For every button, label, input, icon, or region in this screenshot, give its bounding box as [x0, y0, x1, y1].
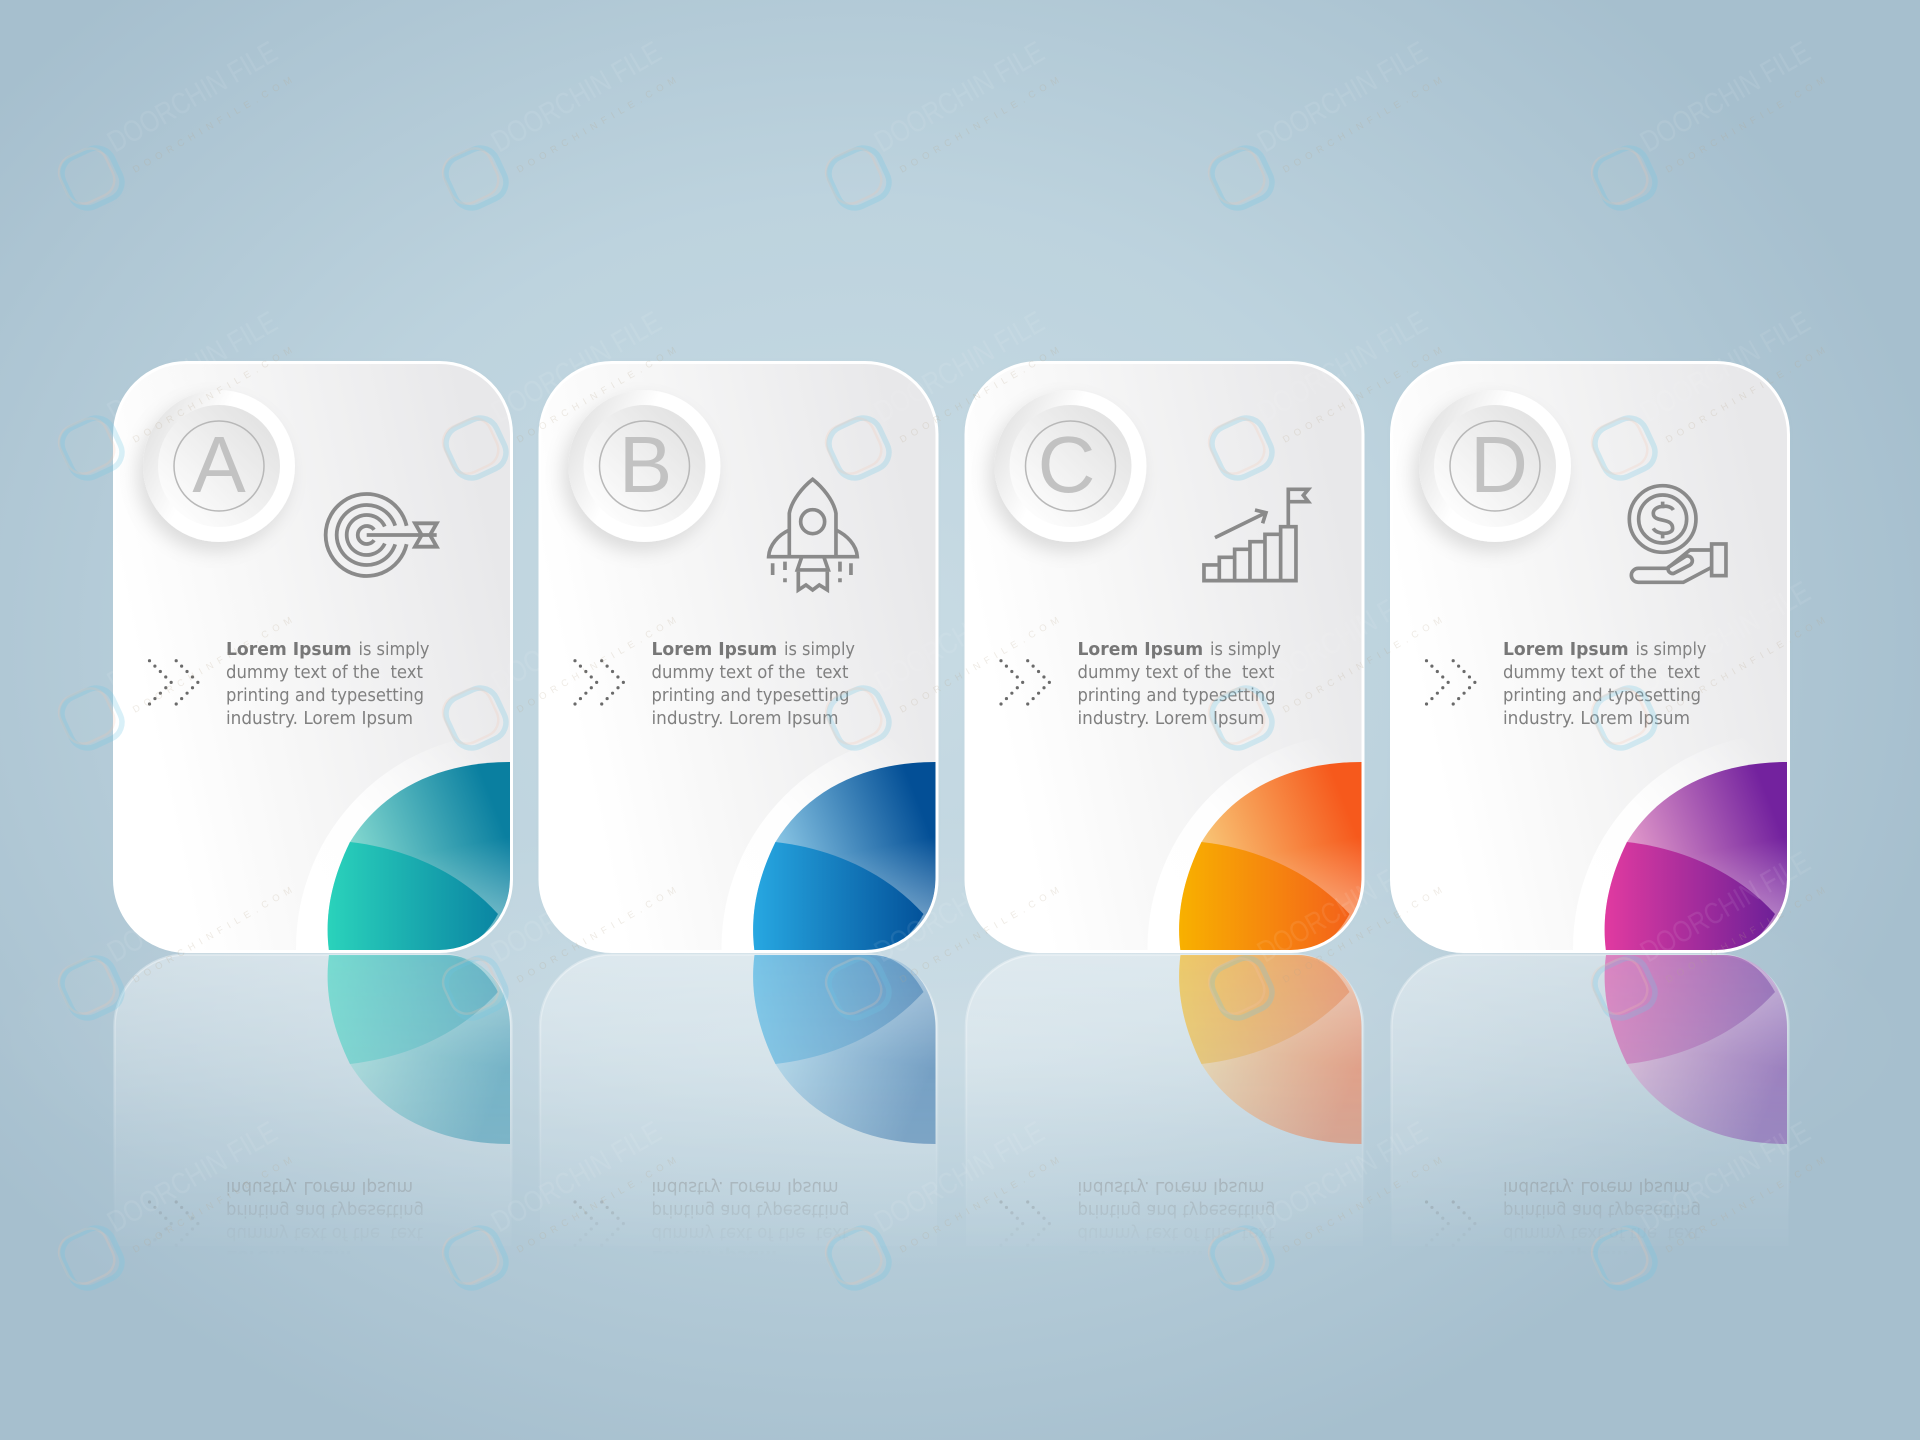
watermark grid: DOORCHIN FILE	[869, 305, 1050, 429]
card body	[1392, 362, 1788, 952]
watermark grid: DOORCHINFILE.COM	[515, 885, 678, 986]
watermark grid: DOORCHIN FILE	[486, 575, 667, 699]
watermark grid: DOORCHINFILE.COM	[131, 885, 294, 986]
text block: Lorem Ipsum	[1503, 640, 1629, 660]
watermark grid: DOORCHINFILE.COM	[131, 1155, 294, 1256]
reflection of card B: Lorem Ipsum	[652, 1246, 777, 1266]
reflection of card D: Lorem Ipsum	[1503, 1246, 1629, 1266]
reflection of card A: industry. Lorem Ipsum	[226, 1177, 413, 1197]
watermark grid: DOORCHINFILE.COM	[515, 1155, 678, 1256]
watermark grid: DOORCHINFILE.COM	[515, 615, 678, 716]
reflection of card C	[965, 953, 1364, 1230]
text block: dummy text of the text	[1078, 663, 1275, 683]
letter badge B	[568, 390, 720, 542]
icon: target with arrow	[326, 494, 437, 576]
watermark grid: DOORCHIN FILE	[102, 35, 283, 159]
watermark grid: DOORCHIN FILE	[102, 1115, 283, 1239]
watermark grid: DOORCHIN FILE	[1252, 575, 1433, 699]
dotted double chevron	[1001, 661, 1049, 704]
watermark grid: DOORCHINFILE.COM	[131, 615, 294, 716]
letter badge C	[994, 390, 1146, 542]
letter badge A	[143, 390, 295, 542]
text block: dummy text of the text	[652, 663, 849, 683]
watermark grid: DOORCHINFILE.COM	[898, 615, 1061, 716]
panel: card C	[964, 361, 1364, 953]
panel: card B	[538, 361, 938, 953]
dotted double chevron	[150, 661, 198, 704]
watermark grid: DOORCHIN FILE	[102, 575, 283, 699]
reflection of card B: industry. Lorem Ipsum	[652, 1177, 838, 1197]
text block: industry. Lorem Ipsum	[226, 709, 413, 729]
watermark grid: DOORCHINFILE.COM	[1664, 885, 1827, 986]
reflection of card C: Lorem Ipsum	[1078, 1246, 1203, 1266]
watermark grid: DOORCHIN FILE	[486, 1115, 667, 1239]
panel: card D	[1390, 361, 1790, 953]
text block	[652, 640, 855, 729]
text block: dummy text of the text	[226, 663, 423, 683]
card body	[540, 362, 937, 952]
watermark grid: DOORCHIN FILE	[1252, 35, 1433, 159]
watermark grid: DOORCHINFILE.COM	[1281, 75, 1444, 176]
watermark grid: DOORCHIN FILE	[869, 35, 1050, 159]
reflection of card A: dummy text of the text	[226, 1223, 423, 1243]
text block: is simply	[1210, 640, 1281, 660]
reflection of card B	[539, 953, 938, 1230]
watermark grid: DOORCHINFILE.COM	[1664, 75, 1827, 176]
watermark grid: DOORCHIN FILE	[1252, 845, 1433, 969]
text block: printing and typesetting	[652, 686, 850, 706]
watermark grid: DOORCHIN FILE	[486, 305, 667, 429]
text block: printing and typesetting	[1078, 686, 1276, 706]
text block	[226, 640, 430, 729]
colour shape: orange	[1179, 762, 1362, 951]
watermark grid: DOORCHIN FILE	[486, 845, 667, 969]
letter badge A: A	[192, 420, 246, 509]
watermark grid: DOORCHINFILE.COM	[1281, 345, 1444, 446]
reflection of card A: printing and typesetting	[226, 1200, 424, 1220]
watermark grid: DOORCHIN FILE	[869, 575, 1050, 699]
watermark grid: DOORCHIN FILE	[1635, 575, 1816, 699]
reflection of card D: printing and typesetting	[1503, 1200, 1701, 1220]
text block: is simply	[1636, 640, 1706, 660]
reflection of card D	[1390, 953, 1790, 1228]
white halo behind colour shape	[746, 780, 828, 910]
dotted double chevron	[575, 661, 623, 704]
dotted double chevron	[1426, 661, 1475, 704]
watermark grid: DOORCHINFILE.COM	[131, 75, 294, 176]
text block: Lorem Ipsum	[652, 640, 777, 660]
text block: industry. Lorem Ipsum	[652, 709, 838, 729]
watermark grid: DOORCHIN FILE	[1635, 35, 1816, 159]
icon: rising bar chart with flag	[1204, 489, 1308, 581]
watermark grid: DOORCHINFILE.COM	[1664, 1155, 1827, 1256]
text block: Lorem Ipsum	[1078, 640, 1203, 660]
watermark grid: DOORCHIN FILE	[869, 845, 1050, 969]
colour shape: teal	[328, 762, 510, 951]
reflection of card B: printing and typesetting	[652, 1200, 850, 1220]
card body	[966, 362, 1363, 952]
text block	[1503, 640, 1706, 729]
watermark grid: DOORCHINFILE.COM	[1281, 1155, 1444, 1256]
text block	[1078, 640, 1281, 729]
colour shape: purple	[1605, 762, 1787, 951]
watermark grid: DOORCHINFILE.COM	[898, 885, 1061, 986]
watermark grid: DOORCHINFILE.COM	[898, 345, 1061, 446]
letter badge D	[1419, 390, 1571, 542]
watermark grid: DOORCHIN FILE	[1635, 845, 1816, 969]
reflection of card D: industry. Lorem Ipsum	[1503, 1177, 1690, 1197]
watermark grid: DOORCHIN FILE	[1252, 1115, 1433, 1239]
icon: rocket	[769, 479, 857, 590]
text block: dummy text of the text	[1503, 663, 1700, 683]
watermark grid: DOORCHINFILE.COM	[515, 345, 678, 446]
white halo behind colour shape	[1172, 780, 1252, 908]
white halo behind colour shape	[1598, 780, 1680, 912]
watermark grid: DOORCHINFILE.COM	[515, 75, 678, 176]
watermark grid: DOORCHINFILE.COM	[898, 75, 1061, 176]
panel: card A	[113, 361, 513, 953]
watermark grid: DOORCHINFILE.COM	[1664, 615, 1827, 716]
text block: is simply	[784, 640, 855, 660]
letter badge D: D	[1470, 420, 1528, 509]
letter badge B: B	[619, 420, 672, 509]
watermark grid: DOORCHIN FILE	[102, 845, 283, 969]
text block: printing and typesetting	[1503, 686, 1701, 706]
reflection of card D: dummy text of the text	[1503, 1223, 1700, 1243]
watermark grid: DOORCHINFILE.COM	[1281, 885, 1444, 986]
reflection of card C: printing and typesetting	[1078, 1200, 1276, 1220]
watermark grid: DOORCHIN FILE	[869, 1115, 1050, 1239]
colour shape: blue	[753, 762, 936, 951]
reflection of card A	[113, 953, 512, 1228]
watermark grid: DOORCHINFILE.COM	[1281, 615, 1444, 716]
text block: Lorem Ipsum	[226, 640, 352, 660]
watermark grid: DOORCHIN FILE	[1635, 1115, 1816, 1239]
text block: is simply	[358, 640, 430, 660]
watermark grid: DOORCHINFILE.COM	[1664, 345, 1827, 446]
text block: printing and typesetting	[226, 686, 424, 706]
watermark grid: DOORCHINFILE.COM	[131, 345, 294, 446]
watermark grid: DOORCHIN FILE	[486, 35, 667, 159]
reflection of card B: dummy text of the text	[652, 1223, 849, 1243]
watermark grid: DOORCHIN FILE	[1635, 305, 1816, 429]
floor glow	[0, 800, 1920, 1280]
card body	[114, 362, 512, 952]
icon: hand holding dollar coin	[1629, 486, 1726, 582]
watermark grid: DOORCHIN FILE	[102, 305, 283, 429]
reflection of card A: Lorem Ipsum	[226, 1246, 352, 1266]
letter badge C: C	[1038, 420, 1095, 509]
text block: industry. Lorem Ipsum	[1078, 709, 1264, 729]
reflection of card C: dummy text of the text	[1078, 1223, 1275, 1243]
text block: industry. Lorem Ipsum	[1503, 709, 1690, 729]
watermark grid: DOORCHINFILE.COM	[898, 1155, 1061, 1256]
reflection of card C: industry. Lorem Ipsum	[1078, 1177, 1264, 1197]
watermark grid: DOORCHIN FILE	[1252, 305, 1433, 429]
white halo behind colour shape	[322, 780, 402, 914]
